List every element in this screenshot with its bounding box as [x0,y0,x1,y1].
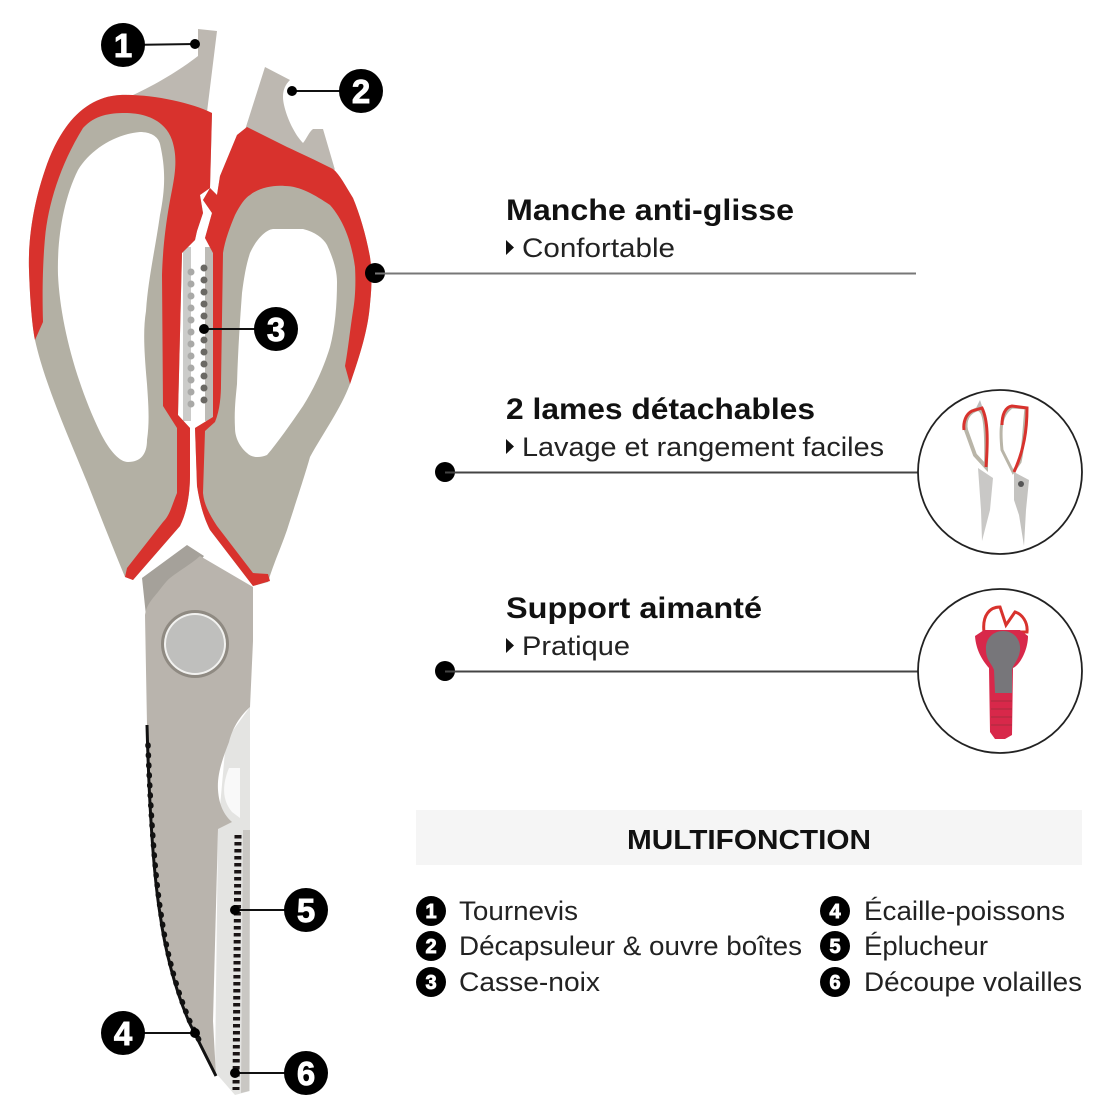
callout 3: 3 [267,311,285,348]
callout 6: 6 [297,1055,315,1092]
multifonction banner [416,810,1082,865]
callout 4 [101,1011,200,1055]
legend item 6: 6 [829,972,841,994]
feature: magnetic holder: Support aimanté [506,592,762,625]
legend item 2: Décapsuleur & ouvre boîtes [459,931,802,961]
callout 1: 1 [114,27,132,64]
feature: magnetic holder: Pratique [522,631,630,661]
callout 2: 2 [352,73,370,110]
rear blade [142,545,250,1095]
legend item 5: 5 [829,936,841,958]
legend item 1: 1 [425,901,437,923]
legend item 4: Écaille-poissons [864,896,1065,926]
right handle [195,127,372,586]
legend item 3: Casse-noix [459,967,601,997]
nutcracker teeth [183,245,213,423]
legend item 1: Tournevis [459,896,578,926]
legend item 5: Éplucheur [864,931,988,961]
feature: detachable blades: Lavage et rangement faciles [522,432,884,462]
scissors illustration [29,29,371,1095]
multifonction banner: MULTIFONCTION [627,824,871,855]
feature: anti-slip handle: Confortable [522,233,675,263]
legend: right column [820,896,1082,997]
legend item 4: 4 [829,901,841,923]
legend item 3: 3 [425,972,437,994]
legend item 6: Découpe volailles [864,967,1082,997]
legend item 2: 2 [425,936,437,958]
callout 1 [101,23,200,67]
feature: anti-slip handle: Manche anti-glisse [506,194,794,227]
fish scaler serrated edge [147,725,216,1076]
callout 2 [287,69,383,113]
poultry shears serration [236,835,238,1090]
front blade [145,556,253,1076]
thumbnail: separated blades [918,390,1082,554]
rivet [161,610,229,678]
callout 5: 5 [297,892,315,929]
callout 4: 4 [114,1015,133,1052]
legend: left column [416,896,802,997]
feature: anti-slip handle [365,194,916,283]
feature: magnetic holder [435,592,918,681]
thumbnail: magnetic holder [918,589,1082,753]
callout 5 [230,888,328,932]
callout 6 [230,1051,328,1095]
callout 3 [199,307,298,351]
feature: detachable blades [435,393,918,482]
top blade tips [133,29,335,170]
left handle [29,95,212,580]
feature: detachable blades: 2 lames détachables [506,393,815,426]
